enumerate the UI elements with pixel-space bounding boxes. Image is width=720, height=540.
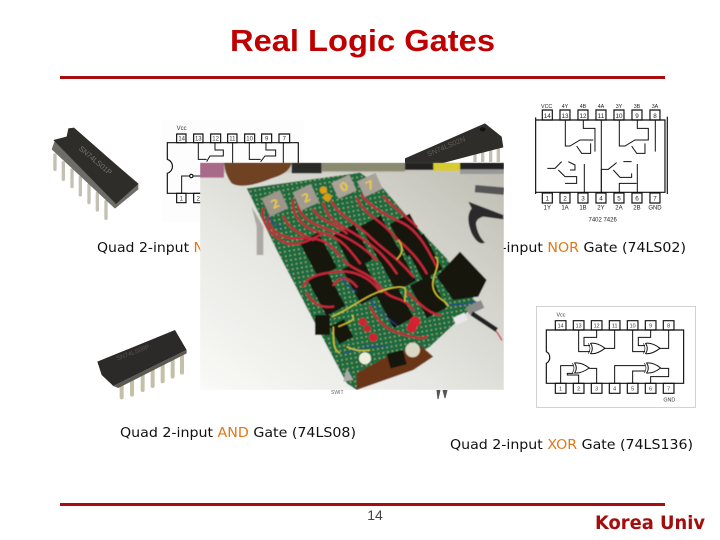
icon: NOR pinout diagram: 4Y — [562, 104, 569, 110]
icon: XOR pinout diagram: 6 — [649, 387, 652, 393]
label: NOR gate: Quad 2-input NOR Gate (74LS02) — [450, 241, 686, 256]
switches and connector — [343, 300, 497, 390]
icon: NAND chip photo — [52, 128, 138, 218]
icon: NOR pinout diagram: 4A — [598, 104, 605, 110]
icon: NOR pinout diagram: 7402 7426 — [588, 217, 617, 223]
seven-segment displays: 2 — [300, 190, 313, 206]
icon: XOR pinout diagram: 2 — [577, 387, 580, 393]
icon: XOR pinout diagram: 14 — [558, 324, 564, 330]
icon: NOR chip photo: SN74LS02N — [426, 134, 467, 159]
icon: NOR pinout diagram: 5 — [617, 196, 621, 203]
icon: NOR pinout diagram: 9 — [635, 113, 639, 120]
icon: stray marks under photo — [437, 390, 447, 399]
dark chips — [300, 213, 487, 344]
icon: XOR pinout diagram: 13 — [576, 324, 582, 330]
icon: NOR pinout diagram: 3Y — [616, 104, 623, 110]
icon: NAND chip photo: SN74LS01P — [77, 144, 114, 177]
icon: NOR pinout diagram: 7 — [653, 196, 657, 203]
icon: XOR pinout diagram: 11 — [612, 324, 617, 330]
label: NAND gate: Quad 2-input NAND Gate (74LS00) — [97, 241, 341, 256]
icon: XOR pinout diagram: 10 — [630, 324, 636, 330]
icon: NOR pinout diagram: 1Y — [544, 205, 551, 211]
top rule — [60, 76, 665, 79]
footer: Korea Univ: Korea Univ — [595, 512, 706, 534]
icon: NOR pinout diagram — [536, 104, 667, 223]
icon: XOR pinout diagram: 8 — [667, 324, 670, 330]
small caption under photo: SWIT — [331, 390, 344, 396]
icon: NOR pinout diagram: 2 — [563, 196, 567, 203]
icon: XOR pinout diagram: GND — [663, 398, 675, 404]
icon: NOR chip photo — [405, 123, 503, 170]
icon: NOR pinout diagram: 4 — [599, 196, 603, 203]
icon: NAND pinout diagram: Vcc — [177, 126, 187, 132]
icon: NOR pinout diagram: 3A — [652, 104, 659, 110]
icon: NOR pinout diagram: GND — [648, 205, 662, 211]
seven-segment displays: 7 — [363, 177, 377, 193]
icon: XOR pinout diagram: 5 — [631, 387, 634, 393]
blue wires — [267, 215, 477, 353]
amber and red LEDs — [320, 186, 420, 342]
title: Real Logic Gates — [230, 23, 495, 58]
seven-segment displays: 2 — [269, 196, 282, 212]
icon: NAND pinout diagram: 13 — [195, 137, 202, 143]
icon: NOR pinout diagram: 1B — [579, 205, 587, 211]
icon: NOR pinout diagram: 12 — [579, 113, 587, 120]
yellow wires — [332, 240, 448, 353]
icon: NOR pinout diagram: VCC — [541, 104, 552, 110]
seven-segment displays: 0 — [337, 179, 351, 195]
icon: NOR pinout diagram: 3B — [634, 104, 641, 110]
red wires — [263, 195, 502, 340]
icon: AND chip photo — [97, 330, 187, 397]
icon: NAND pinout diagram — [162, 121, 303, 222]
icon: NAND pinout diagram: 7 — [283, 137, 287, 143]
photo: wired logic board — [200, 163, 504, 390]
icon: NOR pinout diagram: 11 — [598, 113, 605, 120]
bottom rule — [60, 503, 665, 506]
icon: NOR pinout diagram: 13 — [561, 113, 569, 120]
icon: XOR pinout diagram: 9 — [649, 324, 652, 330]
icon: NOR pinout diagram: 2B — [633, 205, 641, 211]
icon: XOR pinout diagram: 3 — [595, 387, 598, 393]
icon: NOR pinout diagram: 1A — [561, 205, 569, 211]
label: XOR gate: Quad 2-input XOR Gate (74LS136) — [450, 438, 693, 453]
icon: NOR pinout diagram: 10 — [615, 113, 623, 120]
icon: NAND pinout diagram: 14 — [178, 137, 186, 143]
icon: NOR pinout diagram: 4B — [580, 104, 587, 110]
icon: NAND pinout diagram: 9 — [265, 137, 269, 143]
seven-segment displays — [262, 173, 383, 217]
icon: NOR pinout diagram: 1 — [546, 196, 550, 203]
circuit board — [247, 173, 477, 390]
icon: NAND pinout diagram: 12 — [212, 137, 220, 143]
icon: NOR pinout diagram: 2Y — [597, 205, 605, 211]
icon: NOR pinout diagram: 6 — [635, 196, 639, 203]
icon: AND chip photo: SN74LS08P — [116, 344, 151, 363]
icon: XOR pinout diagram: Vcc — [557, 313, 566, 319]
icon: NOR pinout diagram: 14 — [544, 113, 551, 120]
icon: NAND pinout diagram: 11 — [229, 137, 236, 143]
icon: XOR pinout diagram — [536, 306, 696, 407]
icon: NAND pinout diagram: 1 — [180, 197, 184, 203]
icon: NOR pinout diagram: 2A — [615, 205, 623, 211]
icon: XOR pinout diagram: 4 — [613, 387, 616, 393]
icon: XOR pinout diagram: 12 — [594, 324, 600, 330]
icon: XOR pinout diagram: 7 — [667, 387, 670, 393]
icon: NAND pinout diagram: 2 — [197, 197, 201, 203]
icon: XOR pinout diagram: 1 — [559, 387, 562, 393]
label: AND gate: Quad 2-input AND Gate (74LS08) — [120, 426, 356, 441]
page number: 14 — [367, 507, 383, 523]
icon: NOR pinout diagram: 8 — [653, 113, 657, 120]
icon: NAND pinout diagram: 10 — [246, 137, 254, 143]
icon: NOR pinout diagram: 3 — [581, 196, 585, 203]
